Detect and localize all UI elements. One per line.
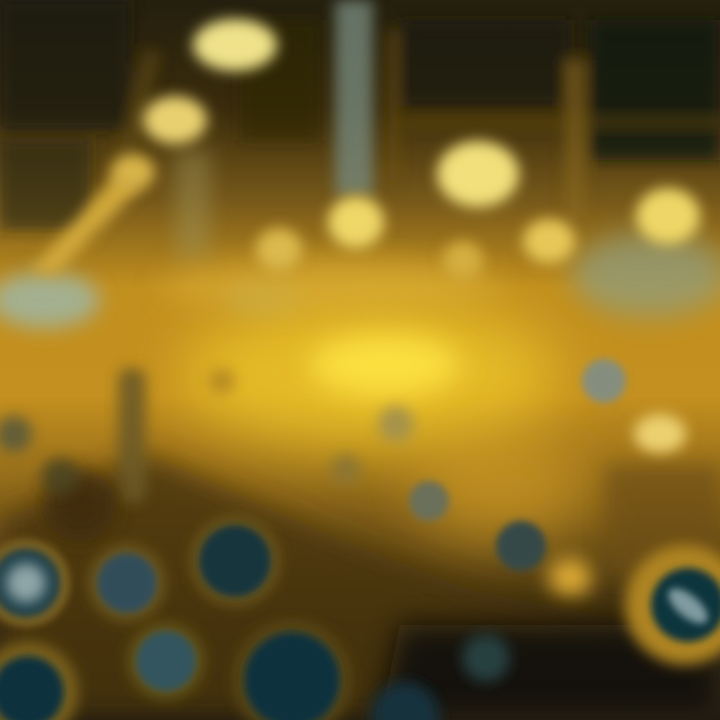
lamp 7 [523,219,575,263]
floating bubbles [0,359,626,571]
bubble 5 [496,521,546,571]
bubble 8 [209,368,235,394]
lamp 4 [437,141,519,207]
left teal haze [0,272,100,328]
bottom right dark mass [380,625,720,720]
right lower yellow field [410,435,590,545]
orb 4 [128,623,204,699]
bubble 2 [378,406,414,442]
lower diagonal dark mass [0,455,720,720]
left dark blob [44,469,116,541]
upper dark grid structure [0,0,720,230]
lower teal orbs [0,517,720,720]
right teal haze [572,233,720,317]
orb 6 [0,642,78,720]
lamp 11 [548,558,592,598]
orb right with gold ring [625,545,720,665]
diagonal light beam [30,172,142,275]
bubble 3 [331,455,361,485]
central grey haze [227,278,303,318]
lamp 2 [143,96,207,144]
orb 2 [89,545,165,621]
secondary pale column [175,150,211,260]
upper golden band [160,257,500,313]
orb 8 [371,682,439,720]
bubble 7 [42,458,78,494]
lamp 6 [328,196,384,248]
hanging lamps [111,19,700,598]
bubble 6 [0,416,32,452]
lamp 3 [111,154,155,190]
orb left with gold ring [0,539,70,627]
lamp 10 [634,414,686,454]
right dark box [605,465,720,575]
brightest glow core [310,333,460,397]
lamp 8 [256,228,302,270]
lamp 1 [193,19,277,71]
bubble 1 [582,359,626,403]
orb 3 [191,517,279,605]
orb 5 [234,622,350,720]
central yellow glow [180,300,560,450]
left dark vertical post [118,368,146,503]
teal vertical light column [335,0,373,195]
orb 7 [462,634,510,682]
bubble 4 [409,481,449,521]
lamp 9 [443,241,483,279]
lamp 5 [636,188,700,244]
